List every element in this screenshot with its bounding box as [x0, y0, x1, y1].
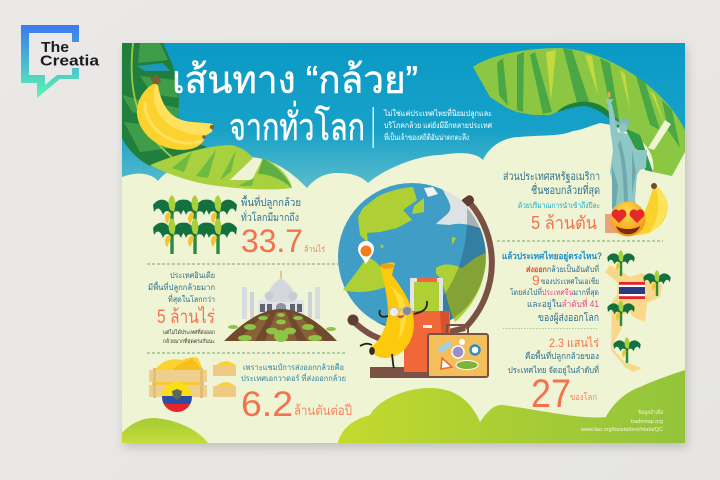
taj mahal on soil mound with sprouts	[224, 271, 337, 342]
india text: 5 ล้านไร่	[157, 306, 215, 328]
thailand section text: ส่งออกกล้วยเป็นอันดับที่	[526, 263, 599, 274]
logo: The Creatia: Creatia	[40, 52, 100, 70]
title: เส้นทาง “กล้วย”	[172, 59, 418, 102]
usa text: 5 ล้านตัน	[531, 213, 597, 233]
globe with stand	[338, 183, 492, 378]
poster panel	[122, 43, 685, 443]
sky background	[122, 43, 685, 188]
sources: ข้อมูลอ้างอิง	[638, 409, 663, 416]
ecuador text: ล้านตันต่อปี	[294, 403, 352, 418]
thailand section text: และอยู่ในลำดับที่ 41	[527, 297, 599, 310]
intro text	[372, 107, 492, 148]
thailand map with plants and flag	[605, 250, 671, 372]
continents	[358, 187, 417, 243]
right banana leaf	[473, 48, 685, 176]
luggage: orange suitcase	[404, 277, 450, 372]
intro text: บริโภคกล้วย แต่ยังมีอีกหลายประเทศ	[384, 120, 492, 130]
small crates	[213, 361, 236, 397]
ecuador flag	[162, 382, 192, 412]
poster shadow	[124, 47, 687, 447]
thailand section text: แล้วประเทศไทยอยู่ตรงไหน?	[502, 250, 602, 262]
world area text	[241, 195, 325, 252]
ecuador text	[241, 363, 352, 416]
thailand section text	[502, 250, 602, 324]
thai flag	[619, 282, 645, 299]
usa text: ด้วยปริมาณการนำเข้าถึงปีละ	[518, 201, 600, 210]
title	[174, 60, 417, 140]
india text: มีพื้นที่ปลูกกล้วยมาก	[148, 281, 215, 293]
intro text: ที่เป็นเจ้าของสถิติอันน่าตกตะลึง	[384, 131, 469, 142]
globe stand arc	[465, 203, 492, 328]
decorative hills	[122, 370, 685, 443]
thailand stats text: 27	[531, 372, 571, 416]
intro text: ไม่ใช่แค่ประเทศไทยที่นิยมปลูกและ	[383, 107, 492, 119]
left banana leaf	[122, 43, 292, 189]
logo: The Creatia: The	[41, 39, 69, 56]
usa banana and heart-eye emoji	[610, 183, 668, 236]
sources: www.fao.org/faostat/en/#data/QC	[580, 427, 663, 433]
thailand stats text: ของโลก	[570, 392, 597, 402]
dashed dividers	[147, 241, 663, 353]
thailand stats text: 2.3 แสนไร่	[549, 336, 599, 350]
thailand stats text	[508, 336, 599, 407]
thailand section text: โดยส่งไปที่ประเทศจีนมากที่สุด	[510, 286, 599, 297]
banana crates and ecuador flag	[149, 357, 236, 414]
sources: trademap.org	[631, 419, 663, 425]
globe shading	[376, 208, 486, 331]
statue of liberty	[605, 91, 647, 233]
usa text: ชื่นชอบกล้วยที่สุด	[531, 182, 600, 197]
india text: ประเทศอินเดีย	[170, 271, 215, 280]
thailand stats text: คือพื้นที่ปลูกกล้วยของ	[525, 350, 599, 362]
thailand section text: ของประเทศในเอเชีย	[541, 277, 599, 286]
sources	[580, 409, 663, 433]
map pin	[358, 241, 374, 264]
india text: กล้วยมากที่สุดตรงกันนะ	[163, 337, 215, 345]
banana character	[360, 262, 427, 368]
banana bunch	[137, 75, 214, 150]
ecuador text: เพราะแชมป์การส่งออกกล้วยคือ	[243, 363, 344, 372]
india text: ที่สุดในโลกกว่า	[168, 293, 215, 304]
thailand section text: ของผู้ส่งออกโลก	[538, 311, 599, 324]
thailand stats text: ประเทศไทย จัดอยู่ในลำดับที่	[508, 364, 599, 376]
usa text: ส่วนประเทศสหรัฐอเมริกา	[503, 171, 600, 183]
india text	[148, 271, 215, 345]
ecuador text: ประเทศเอกวาดอร์ ที่ส่งออกกล้วย	[241, 373, 346, 383]
thailand section text: 9	[532, 272, 540, 288]
world area text: พื้นที่ปลูกกล้วย	[241, 195, 301, 209]
globe sphere	[338, 183, 486, 331]
world area text: ล้านไร่	[304, 244, 325, 254]
india text: แต่ไม่ได้ประเทศที่ส่งออก	[163, 328, 215, 336]
luggage: tan suitcase with stickers	[428, 325, 488, 377]
banana plants grid	[153, 195, 237, 254]
world area text: 33.7	[241, 223, 303, 259]
title: จากทั่วโลก	[229, 101, 365, 149]
logo: The Creatia	[21, 25, 100, 98]
world area text: ทั่วโลกมีมากถึง	[241, 210, 299, 224]
ecuador text: 6.2	[241, 385, 293, 424]
usa text	[503, 171, 600, 233]
